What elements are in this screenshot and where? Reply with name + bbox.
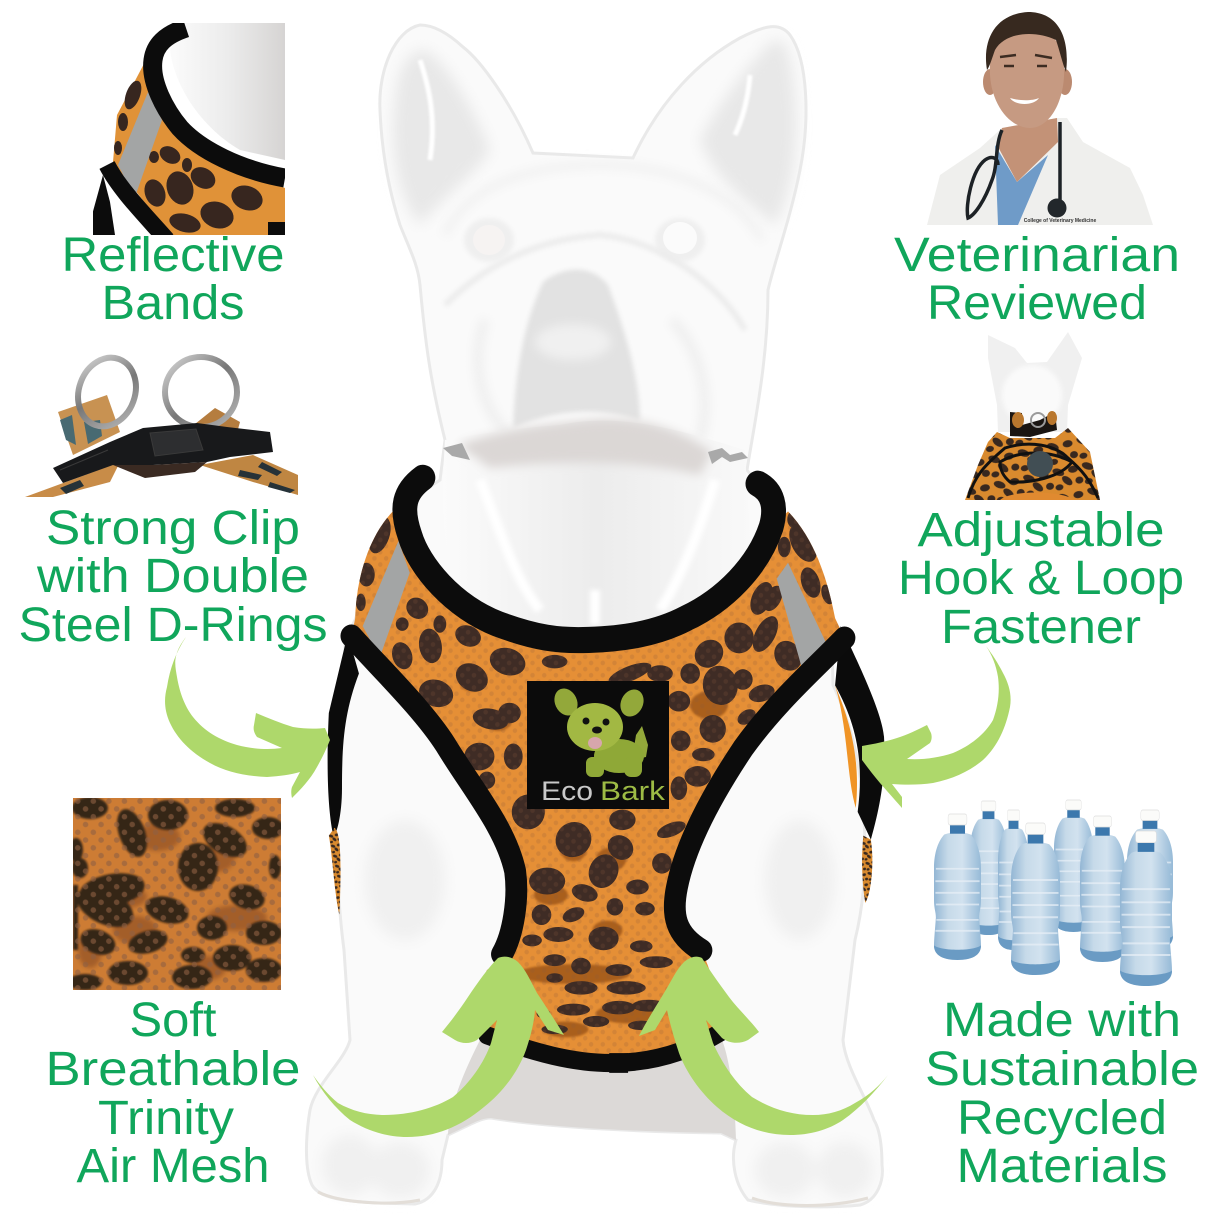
muzzle highlight (535, 324, 611, 360)
EcoBark logo patch (527, 681, 669, 809)
brows and eyes (1000, 55, 1052, 66)
left lower trim (351, 636, 516, 954)
photo: dog back view (965, 332, 1100, 500)
back mesh right (862, 836, 872, 903)
photo: veterinarian (927, 12, 1153, 225)
round badge (1027, 451, 1053, 477)
steel ring (1031, 413, 1045, 427)
leg shading (322, 820, 873, 1198)
brown smears (78, 823, 267, 980)
right eye (655, 218, 705, 262)
belly between legs (448, 1040, 736, 1140)
left loop strap (58, 395, 120, 455)
lower trim (107, 165, 167, 240)
heading: strong clip: with Double (36, 550, 309, 603)
smile (1010, 98, 1039, 104)
reflective band right (777, 563, 826, 666)
small dog head (988, 332, 1082, 432)
arrow: recycled materials to harness (639, 957, 888, 1135)
heading: veterinarian reviewed: Veterinarian (894, 229, 1180, 282)
bottle front row (934, 814, 1172, 986)
connector straps (1012, 412, 1024, 428)
back inner orange right (835, 685, 857, 808)
ear highlights (420, 60, 750, 160)
scrubs (995, 145, 1048, 225)
arrow: strong clip to harness (165, 637, 330, 798)
head highlight (1004, 367, 1060, 423)
dog figure (306, 25, 882, 1207)
inner orange (1000, 492, 1075, 500)
heading: strong clip: Steel D-Rings (18, 599, 328, 652)
heading: air mesh: Trinity (98, 1092, 234, 1145)
mesh body (351, 511, 844, 1055)
stethoscope disk (1048, 198, 1066, 218)
heading: strong clip: Strong Clip (46, 502, 300, 555)
black edge trim (351, 478, 844, 1063)
heading: air mesh: Breathable (46, 1043, 300, 1096)
right ear inner shading (700, 40, 796, 225)
heading: adjustable fastener: Hook & Loop (898, 552, 1184, 605)
small harness (965, 428, 1100, 500)
photo: mesh close-up (68, 797, 284, 990)
connector (1010, 412, 1057, 437)
arrow: hook and loop to harness (862, 646, 1011, 808)
chin shadow (458, 419, 712, 475)
photo: recycled water bottles (934, 800, 1173, 986)
heading: recycled materials: Recycled (957, 1092, 1167, 1145)
chest tab (609, 1053, 628, 1073)
back strap right (835, 626, 884, 840)
ear left (983, 69, 994, 95)
chin and neck (443, 421, 750, 635)
heading: reflective bands: Reflective (62, 229, 284, 282)
heading: air mesh: Soft (130, 994, 216, 1047)
heading: air mesh (46, 994, 300, 1193)
neck band (405, 478, 774, 640)
left ear inner shading (393, 50, 490, 225)
right D-ring (165, 357, 237, 427)
logo edge (268, 222, 285, 235)
harness (310, 460, 900, 1080)
heading: recycled materials: Materials (956, 1140, 1168, 1193)
ear right (1062, 69, 1072, 95)
photo: buckle and D-rings (25, 350, 298, 497)
dark spots (68, 797, 284, 990)
strap spots (60, 462, 295, 494)
neck (997, 118, 1058, 182)
heading: recycled materials: Made with (943, 994, 1181, 1047)
lower straps (200, 455, 298, 495)
bottle back row (970, 800, 1173, 950)
hair (986, 12, 1067, 72)
heading: strong clip (18, 502, 328, 652)
coat (927, 118, 1153, 225)
plastic buckle (53, 423, 273, 483)
leopard spots (310, 460, 900, 1080)
reflective strip (118, 92, 162, 197)
back strap (196, 408, 240, 428)
buckle highlights (60, 429, 203, 470)
buckle underside (113, 462, 207, 478)
logo puppy (550, 685, 648, 777)
neck (186, 23, 285, 160)
arrow: air mesh to harness (313, 957, 564, 1137)
heading: recycled materials (925, 994, 1199, 1193)
heading: air mesh: Air Mesh (76, 1140, 270, 1193)
heading: reflective bands: Bands (102, 277, 244, 330)
coat badge text: College of Veterinary Medicine (1024, 218, 1096, 224)
strap (92, 175, 115, 235)
stethoscope (967, 122, 1060, 218)
heading: veterinarian reviewed: Reviewed (927, 277, 1147, 330)
neck highlights (480, 480, 715, 625)
bottom trim (487, 1031, 722, 1063)
heading: adjustable fastener (898, 504, 1184, 654)
flews shadow (478, 320, 705, 440)
neck trim (153, 28, 285, 178)
back mesh left (329, 828, 341, 915)
heading: recycled materials: Sustainable (925, 1043, 1199, 1096)
back strap left (328, 634, 359, 836)
muzzle center (513, 270, 640, 428)
jagged neck shadows (443, 443, 748, 464)
heading: veterinarian reviewed (894, 229, 1180, 330)
brow highlight (445, 165, 762, 240)
right lower trim (675, 638, 844, 950)
spots (114, 79, 266, 236)
left eye (464, 218, 514, 262)
reflective band left (363, 541, 410, 658)
heading: adjustable fastener: Adjustable (918, 504, 1164, 557)
left D-ring (75, 354, 139, 430)
face (990, 30, 1064, 128)
dog silhouette (306, 25, 882, 1207)
EcoBark logo patch: Bark (600, 776, 666, 806)
harness trim (968, 444, 1098, 498)
photo: reflective bands (92, 23, 285, 240)
mesh (113, 58, 285, 235)
heading: reflective bands (62, 229, 284, 330)
logo wordmark: Eco (541, 776, 593, 806)
muzzle fold lines (445, 235, 745, 330)
paw base lines (318, 1192, 868, 1206)
heading: adjustable fastener: Fastener (941, 601, 1141, 654)
